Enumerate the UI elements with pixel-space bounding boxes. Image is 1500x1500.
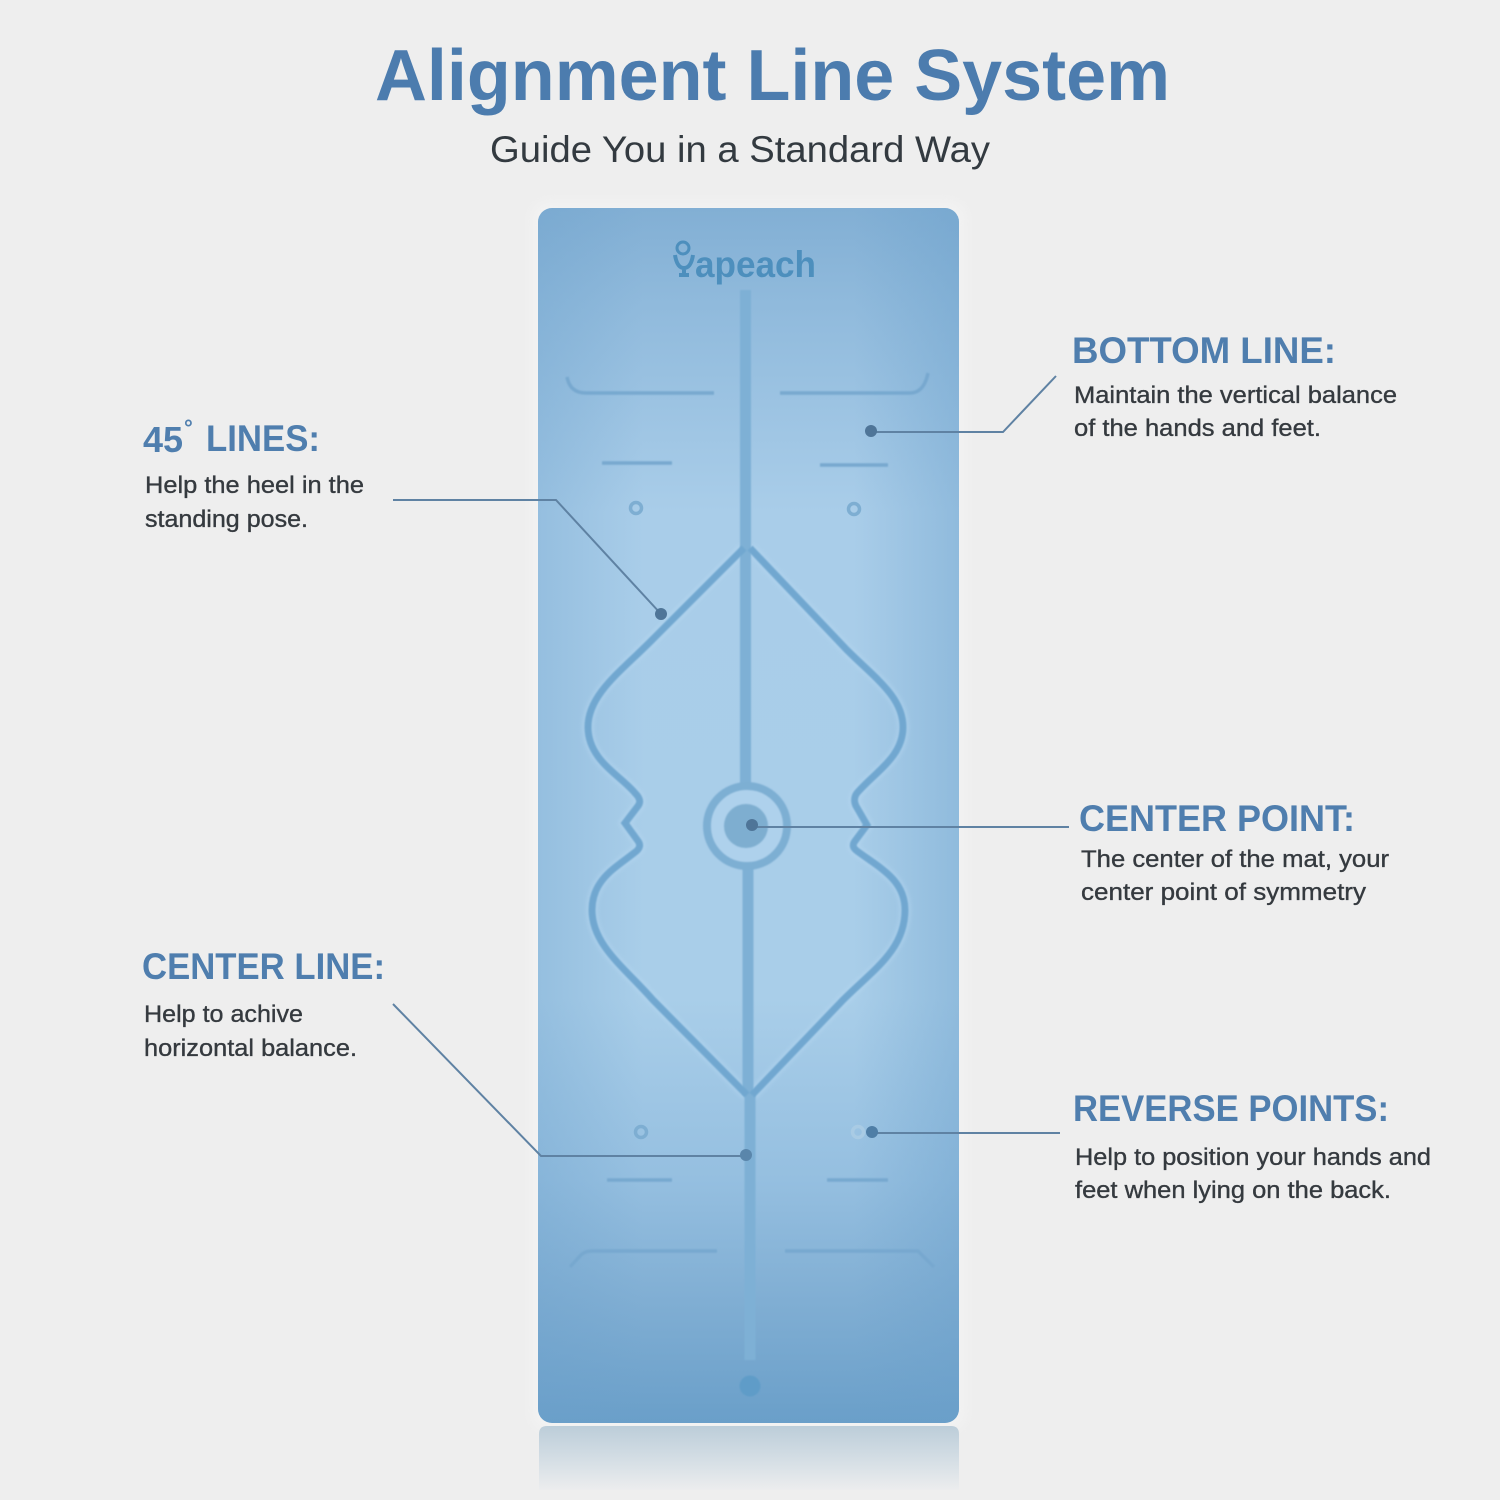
mat guide marks xyxy=(567,373,934,1267)
callout: 45 degree lines: Help the heel in the xyxy=(145,472,364,499)
callout: center point xyxy=(746,798,1389,906)
callout: reverse points: Help to position your hands and xyxy=(1075,1144,1431,1171)
callout: center line xyxy=(142,946,752,1161)
yoga mat xyxy=(538,208,959,1423)
callout: reverse points: REVERSE POINTS: xyxy=(1073,1088,1389,1129)
callout: bottom line: BOTTOM LINE: xyxy=(1072,330,1336,371)
callout: 45 degree lines xyxy=(143,415,667,620)
mat guide circles xyxy=(630,502,864,1138)
title: Alignment Line System xyxy=(375,36,1170,116)
callout: bottom line: of the hands and feet. xyxy=(1074,415,1321,442)
callout: center point: The center of the mat, your xyxy=(1081,846,1389,873)
callout: 45 degree lines: ° xyxy=(184,415,193,440)
mat center rings xyxy=(707,786,787,866)
callout: bottom line xyxy=(865,330,1397,442)
callout: reverse points: feet when lying on the back. xyxy=(1075,1177,1391,1204)
callout: center line: horizontal balance. xyxy=(144,1035,357,1062)
callout: reverse points xyxy=(866,1088,1431,1204)
callout: 45 degree lines: 45 xyxy=(143,419,183,460)
mat reflection xyxy=(539,1426,959,1490)
callout: 45 degree lines: LINES: xyxy=(206,418,320,459)
callout: center point: CENTER POINT: xyxy=(1079,798,1355,839)
mat body outline xyxy=(588,548,905,1095)
callout: center point: center point of symmetry xyxy=(1081,879,1366,906)
mat center line xyxy=(746,290,750,1360)
callout: 45 degree lines: standing pose. xyxy=(145,506,308,533)
callout: center line: CENTER LINE: xyxy=(142,946,385,987)
mat line halo xyxy=(588,548,905,1095)
mat bottom dot xyxy=(740,1376,760,1396)
callout: center line: Help to achive xyxy=(144,1001,303,1028)
subtitle: Guide You in a Standard Way xyxy=(490,129,991,170)
callout: bottom line: Maintain the vertical balance xyxy=(1074,382,1397,409)
mat brand logo: apeach xyxy=(695,244,816,285)
